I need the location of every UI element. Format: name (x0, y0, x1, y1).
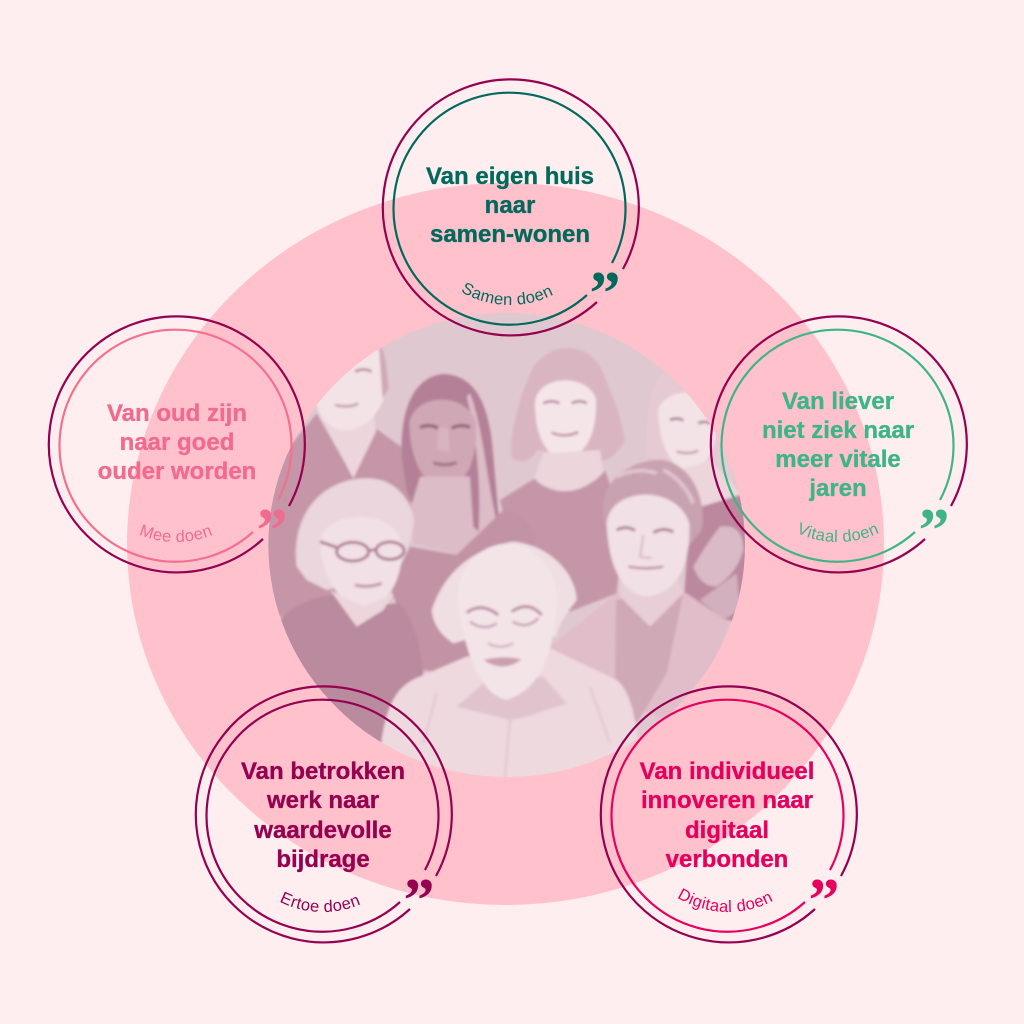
heading: naar (485, 192, 535, 219)
icon: quote mark: ” (256, 497, 288, 565)
heading: meer vitale (775, 446, 901, 473)
icon: quote mark: ” (808, 867, 840, 935)
old man in front (380, 542, 638, 793)
large pink circle (127, 183, 884, 905)
heading: samen-wonen (430, 221, 590, 248)
heading: bijdrage (276, 846, 370, 873)
inner ring (722, 330, 954, 562)
inner ring (394, 93, 626, 325)
woman with long hair (391, 372, 511, 672)
heading: Van liever (782, 388, 894, 415)
label: Digitaal doen (678, 888, 772, 912)
heading: innoveren naar (641, 787, 813, 814)
quote ring: Vitaal doen (710, 315, 968, 574)
quote ring: Digitaal doen (600, 685, 858, 944)
man top left (260, 338, 413, 617)
far right woman (647, 367, 757, 627)
heading: Van oud zijn (107, 400, 247, 427)
outer ring (711, 316, 967, 572)
old woman with glasses (280, 478, 423, 743)
heading: niet ziek naar (762, 417, 914, 444)
inner ring (207, 700, 439, 932)
woman centre right (500, 348, 625, 612)
outer ring (49, 316, 305, 572)
icon: quote mark: ” (404, 867, 434, 935)
heading: digitaal (685, 817, 769, 844)
heading: Van betrokken (241, 758, 405, 785)
quote ring: Mee doen (48, 315, 306, 574)
label: Samen doen (462, 283, 553, 306)
group photo of seven people (260, 310, 757, 793)
icon: quote mark: ” (590, 260, 620, 328)
icon: quote mark: ” (918, 497, 950, 565)
inner ring (60, 330, 292, 562)
heading: ouder worden (98, 458, 256, 485)
outer ring (601, 686, 857, 942)
heading: naar goed (120, 429, 234, 456)
label: Ertoe doen (280, 892, 360, 912)
inner ring (612, 700, 844, 932)
label: Mee doen (140, 524, 212, 542)
young man with jacket (550, 460, 730, 723)
label: Vitaal doen (800, 522, 878, 542)
heading: werk naar (266, 787, 379, 814)
heading: waardevolle (253, 817, 392, 844)
quote ring: Samen doen (382, 78, 640, 336)
heading: Van eigen huis (426, 163, 594, 190)
outer ring (196, 686, 452, 942)
outer ring (383, 79, 639, 335)
glasses (320, 542, 404, 561)
heading: Van individueel (640, 758, 814, 785)
heading: jaren (808, 475, 867, 502)
quote ring: Ertoe doen (194, 685, 453, 944)
heading: verbonden (666, 846, 788, 873)
